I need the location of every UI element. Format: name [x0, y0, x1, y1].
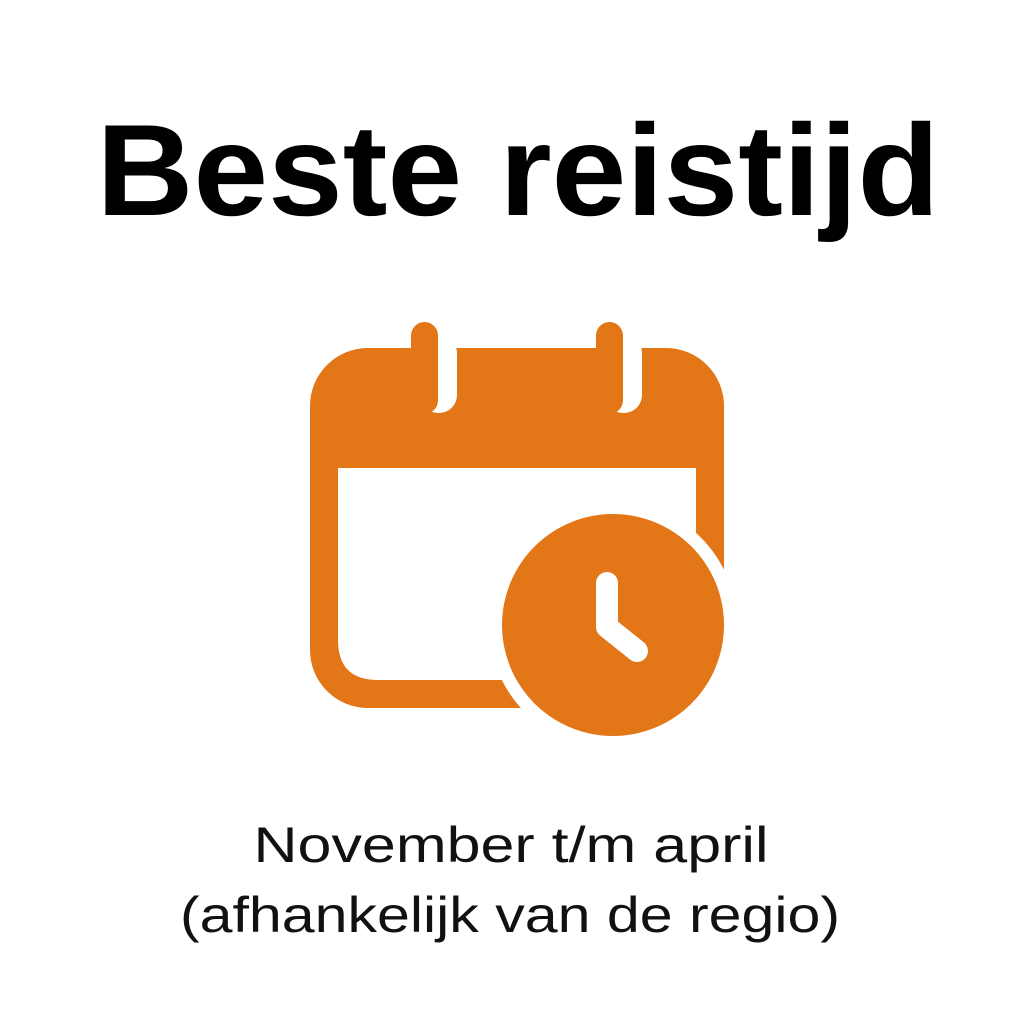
title: Beste reistijd [96, 97, 939, 243]
subtitle text [180, 817, 840, 943]
subtitle text: (afhankelijk van de regio) [180, 887, 840, 943]
icon: calendar with clock [310, 322, 737, 749]
subtitle text: November t/m april [254, 817, 768, 873]
